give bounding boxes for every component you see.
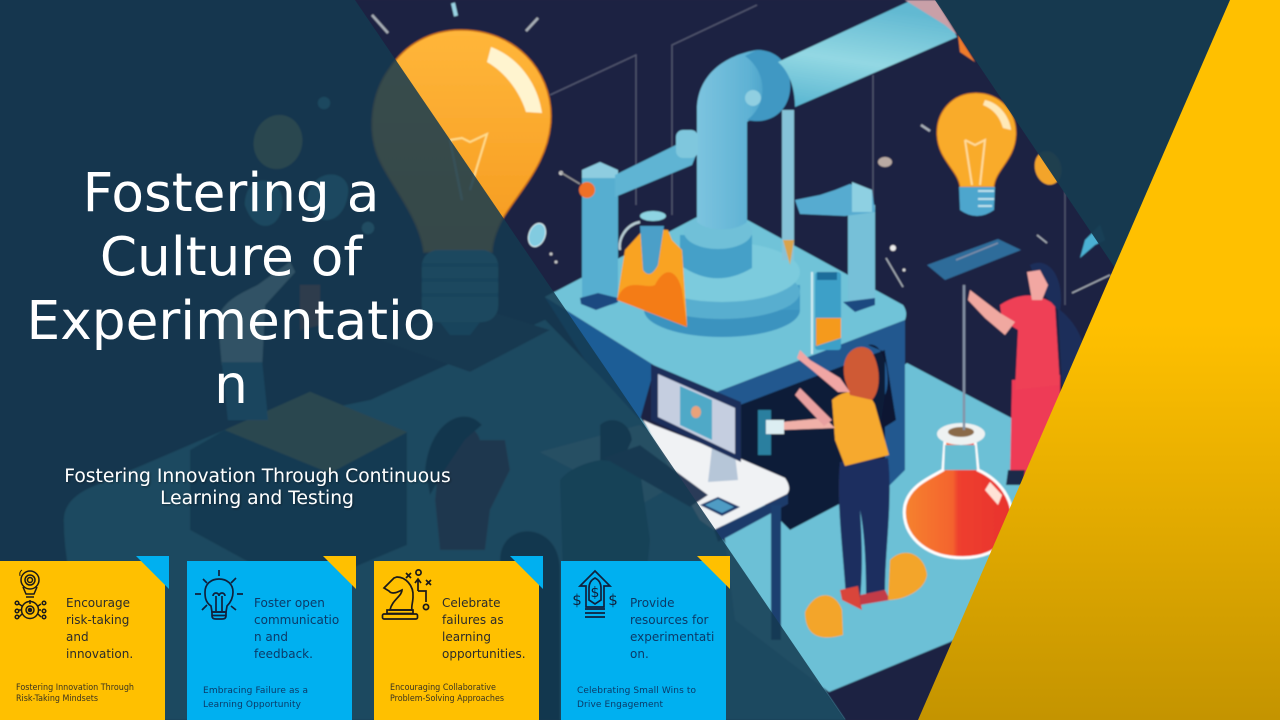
big light bulb — [372, 30, 551, 335]
card 1 caption: Risk-Taking Mindsets — [16, 694, 99, 704]
dark overlay: upper right diagonal panel — [935, 0, 1230, 268]
decorative sparks — [372, 3, 1110, 293]
card 4 corner tab — [697, 556, 730, 589]
title: Experimentatio — [27, 290, 435, 352]
woman in red — [968, 263, 1087, 485]
yellow diagonal panel — [918, 0, 1280, 720]
title: Fostering a — [83, 162, 379, 224]
card 3 caption: Problem-Solving Approaches — [390, 694, 505, 704]
icon dollar signs: $ — [572, 591, 582, 609]
card 4 caption: Celebrating Small Wins to — [577, 686, 696, 696]
card 3 main text: opportunities. — [442, 647, 526, 661]
card 2: communication — [187, 556, 356, 720]
title — [27, 162, 435, 416]
icon dollar signs — [572, 585, 618, 609]
card 4 main text: on. — [630, 647, 649, 661]
card 2 main text: Foster open — [254, 596, 325, 610]
round flask — [904, 285, 1012, 558]
card 1 main text: and — [66, 630, 89, 644]
card 4 main text: experimentati — [630, 630, 714, 644]
title: Culture of — [100, 226, 363, 288]
small light bulb — [937, 93, 1016, 216]
card 2 corner tab — [323, 556, 356, 589]
vertical pipe — [697, 50, 790, 230]
small droplet — [525, 221, 549, 249]
card 1: risk-taking — [0, 556, 169, 720]
reactor base rings — [644, 215, 800, 337]
card 2 main text: communicatio — [254, 613, 339, 627]
card 2 main text: n and — [254, 630, 288, 644]
small orange shapes at diagonal — [1031, 148, 1065, 188]
card 2 main text — [254, 596, 339, 661]
icon dollar signs: $ — [591, 585, 599, 601]
subtitle: Learning and Testing — [160, 488, 354, 509]
card 3 main text — [442, 596, 526, 661]
wall lines — [550, 5, 1065, 305]
card 2 caption: Embracing Failure as a — [203, 686, 308, 696]
orange flask — [617, 211, 687, 327]
card 1 corner tab — [136, 556, 169, 589]
icon: light bulb — [195, 570, 243, 619]
card 3 main text: learning — [442, 630, 491, 644]
horizontal pipe — [778, 0, 957, 107]
monitor and desk — [604, 364, 789, 640]
card 1 main text: Encourage — [66, 596, 130, 610]
card 4 main text — [630, 596, 714, 661]
left robot arm — [579, 130, 698, 310]
card 2 caption: Learning Opportunity — [203, 700, 302, 710]
card 3 caption — [390, 683, 505, 704]
card 1 caption: Fostering Innovation Through — [16, 683, 134, 693]
subtitle — [64, 466, 451, 509]
icon: bulb with gear and network — [15, 570, 46, 619]
faded figures left — [218, 97, 374, 420]
card 1 caption — [16, 683, 134, 704]
card 3 main text: failures as — [442, 613, 504, 627]
card 4: resources — [561, 556, 730, 720]
card 4 caption: Drive Engagement — [577, 700, 663, 710]
beaker — [811, 272, 841, 354]
card 4 main text: Provide — [630, 596, 674, 610]
card 3: failures — [374, 556, 543, 720]
reactor platform — [545, 205, 906, 530]
card 2 main text: feedback. — [254, 647, 313, 661]
card 3 corner tab — [510, 556, 543, 589]
card 2 caption — [203, 686, 308, 710]
orange lumps — [805, 553, 927, 638]
card 4 main text: resources for — [630, 613, 709, 627]
card 1 main text — [66, 596, 133, 661]
card 1 main text: risk-taking — [66, 613, 129, 627]
icon: dollar arrow — [580, 571, 610, 617]
card 3 caption: Encouraging Collaborative — [390, 683, 496, 693]
card 1 main text: innovation. — [66, 647, 133, 661]
title: n — [214, 354, 248, 416]
icon dollar signs: $ — [608, 591, 618, 609]
card 3 main text: Celebrate — [442, 596, 500, 610]
tablet — [927, 239, 1021, 280]
right robot arm and tube — [782, 110, 875, 312]
subtitle: Fostering Innovation Through Continuous — [64, 466, 451, 487]
card 4 caption — [577, 686, 696, 710]
left floor and furniture — [64, 302, 1110, 720]
woman in yellow — [758, 345, 896, 610]
icon: chess knight and strategy — [382, 570, 431, 619]
dark overlay: left diagonal panel — [0, 0, 845, 720]
